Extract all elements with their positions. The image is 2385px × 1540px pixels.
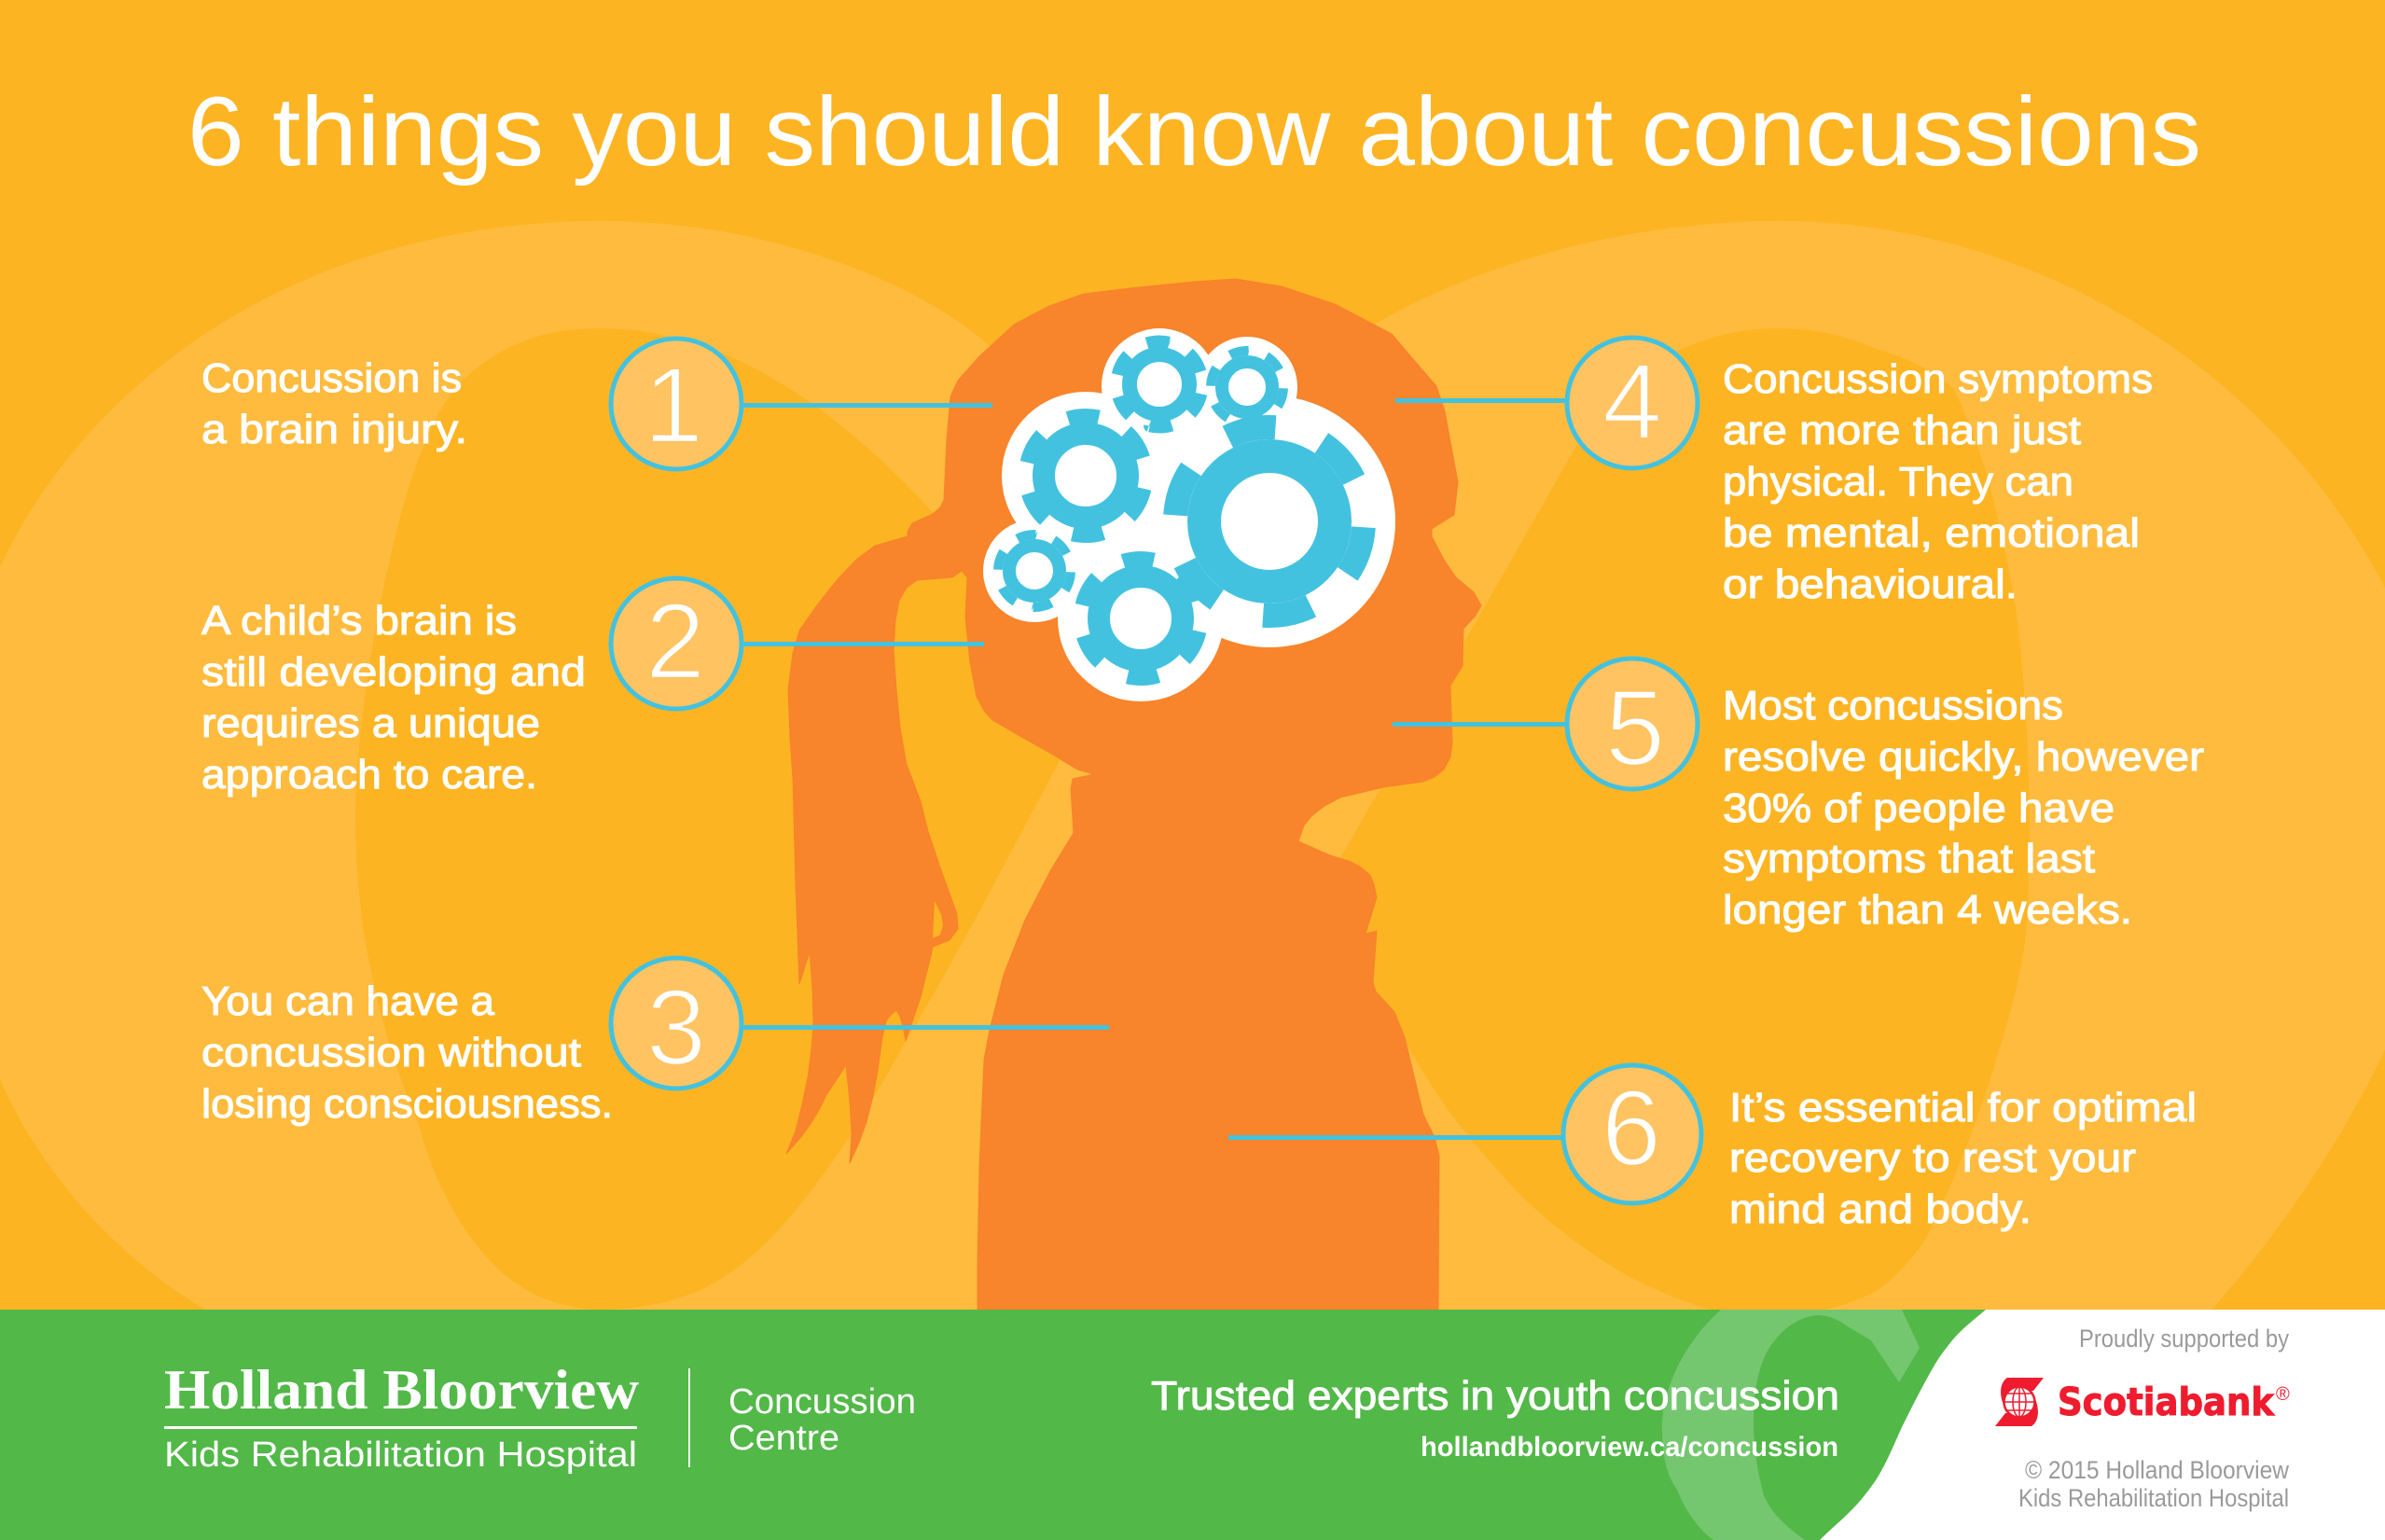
item 1 text (201, 355, 467, 452)
item 4 (1567, 338, 2153, 607)
footer band (0, 1310, 2385, 1540)
item 5 text: Most concussions (1723, 683, 2063, 728)
item 2 text: A child’s brain is (201, 598, 517, 644)
website url: hollandbloorview.ca/concussion (1421, 1432, 1838, 1463)
item 5 text (1723, 683, 2204, 933)
item 1 badge: 1 (644, 346, 703, 465)
vertical divider (688, 1368, 690, 1467)
item 4 text: are more than just (1723, 408, 2081, 453)
white brain blob (983, 328, 1395, 701)
item 3 (201, 958, 742, 1127)
item 2 badge: 2 (645, 582, 705, 701)
gear top right (1210, 350, 1284, 424)
gear lower middle (1069, 547, 1213, 690)
logo: Holland Bloorview: Kids Rehabilitation Hospital (164, 1436, 637, 1475)
item 1 text: Concussion is (201, 355, 462, 401)
item 5 badge: 5 (1605, 669, 1665, 788)
logo: Holland Bloorview: Holland Bloorview (164, 1359, 640, 1421)
hair ribbon gap (933, 901, 943, 938)
item 2 (201, 578, 742, 798)
item 3 text: losing consciousness. (201, 1081, 613, 1127)
copyright (2018, 1456, 2289, 1512)
gear large (1169, 421, 1370, 622)
item 3 text (201, 978, 613, 1127)
copyright: © 2015 Holland Bloorview (2025, 1456, 2289, 1484)
white corner panel (1820, 1310, 2385, 1540)
item 6 text: mind and body. (1729, 1186, 2031, 1232)
item 2 text: requires a unique (201, 701, 540, 746)
item 2 text: still developing and (201, 649, 586, 695)
item 4 text: be mental, emotional (1723, 510, 2140, 556)
gear small left (997, 534, 1072, 608)
Scotiabank wordmark: Scotiabank (2058, 1380, 2276, 1424)
child silhouette (786, 279, 1481, 1310)
item 3 badge (611, 958, 742, 1089)
gear top (1108, 333, 1211, 436)
item 5 (1567, 659, 2204, 933)
item 1 text: a brain injury. (201, 407, 467, 452)
concussion centre label: Centre (728, 1419, 839, 1458)
tagline: Trusted experts in youth concussion (1151, 1373, 1839, 1419)
item 2 text (201, 598, 586, 798)
item 6 text: It’s essential for optimal (1729, 1085, 2197, 1131)
item 5 text: longer than 4 weeks. (1723, 887, 2132, 933)
item 6 text (1729, 1085, 2197, 1232)
item 5 text: symptoms that last (1723, 836, 2095, 881)
item 4 badge (1567, 338, 1698, 468)
item 4 text: Concussion symptoms (1723, 356, 2153, 402)
item 4 text (1723, 356, 2153, 607)
registered mark: ® (2276, 1384, 2290, 1405)
item 3 text: concussion without (201, 1030, 581, 1075)
item 2 text: approach to care. (201, 752, 537, 798)
item 3 text: You can have a (201, 978, 495, 1024)
title: 6 things you should know about concussions (187, 77, 2201, 187)
icon: Scotiabank logo mark (1995, 1378, 2044, 1426)
item 6 badge (1563, 1065, 1701, 1203)
background logo: interlocked loops (0, 221, 2385, 1313)
item 4 text: or behavioural. (1723, 562, 2018, 607)
green band (0, 1310, 2385, 1540)
item 6 badge: 6 (1602, 1069, 1661, 1188)
item 4 badge: 4 (1602, 342, 1662, 462)
item 5 text: 30% of people have (1723, 785, 2115, 831)
supported by: Proudly supported by (2079, 1325, 2289, 1353)
item 5 text: resolve quickly, however (1723, 734, 2204, 780)
item 2 badge (611, 578, 742, 709)
footer logo watermark (1662, 1310, 1920, 1540)
logo: Holland Bloorview (164, 1359, 640, 1475)
brain gears (983, 328, 1395, 701)
gear upper left (1014, 404, 1158, 548)
item 6 text: recovery to rest your (1729, 1135, 2136, 1181)
item 5 badge (1567, 659, 1698, 789)
item 4 text: physical. They can (1723, 459, 2073, 505)
item 6 (1563, 1065, 2197, 1232)
item 1 badge (611, 339, 742, 469)
concussion centre label (728, 1382, 916, 1458)
item 1 (201, 339, 742, 469)
item 3 badge: 3 (646, 968, 706, 1088)
copyright: Kids Rehabilitation Hospital (2018, 1484, 2289, 1512)
connector lines (743, 398, 1567, 1140)
concussion centre label: Concussion (728, 1382, 916, 1422)
